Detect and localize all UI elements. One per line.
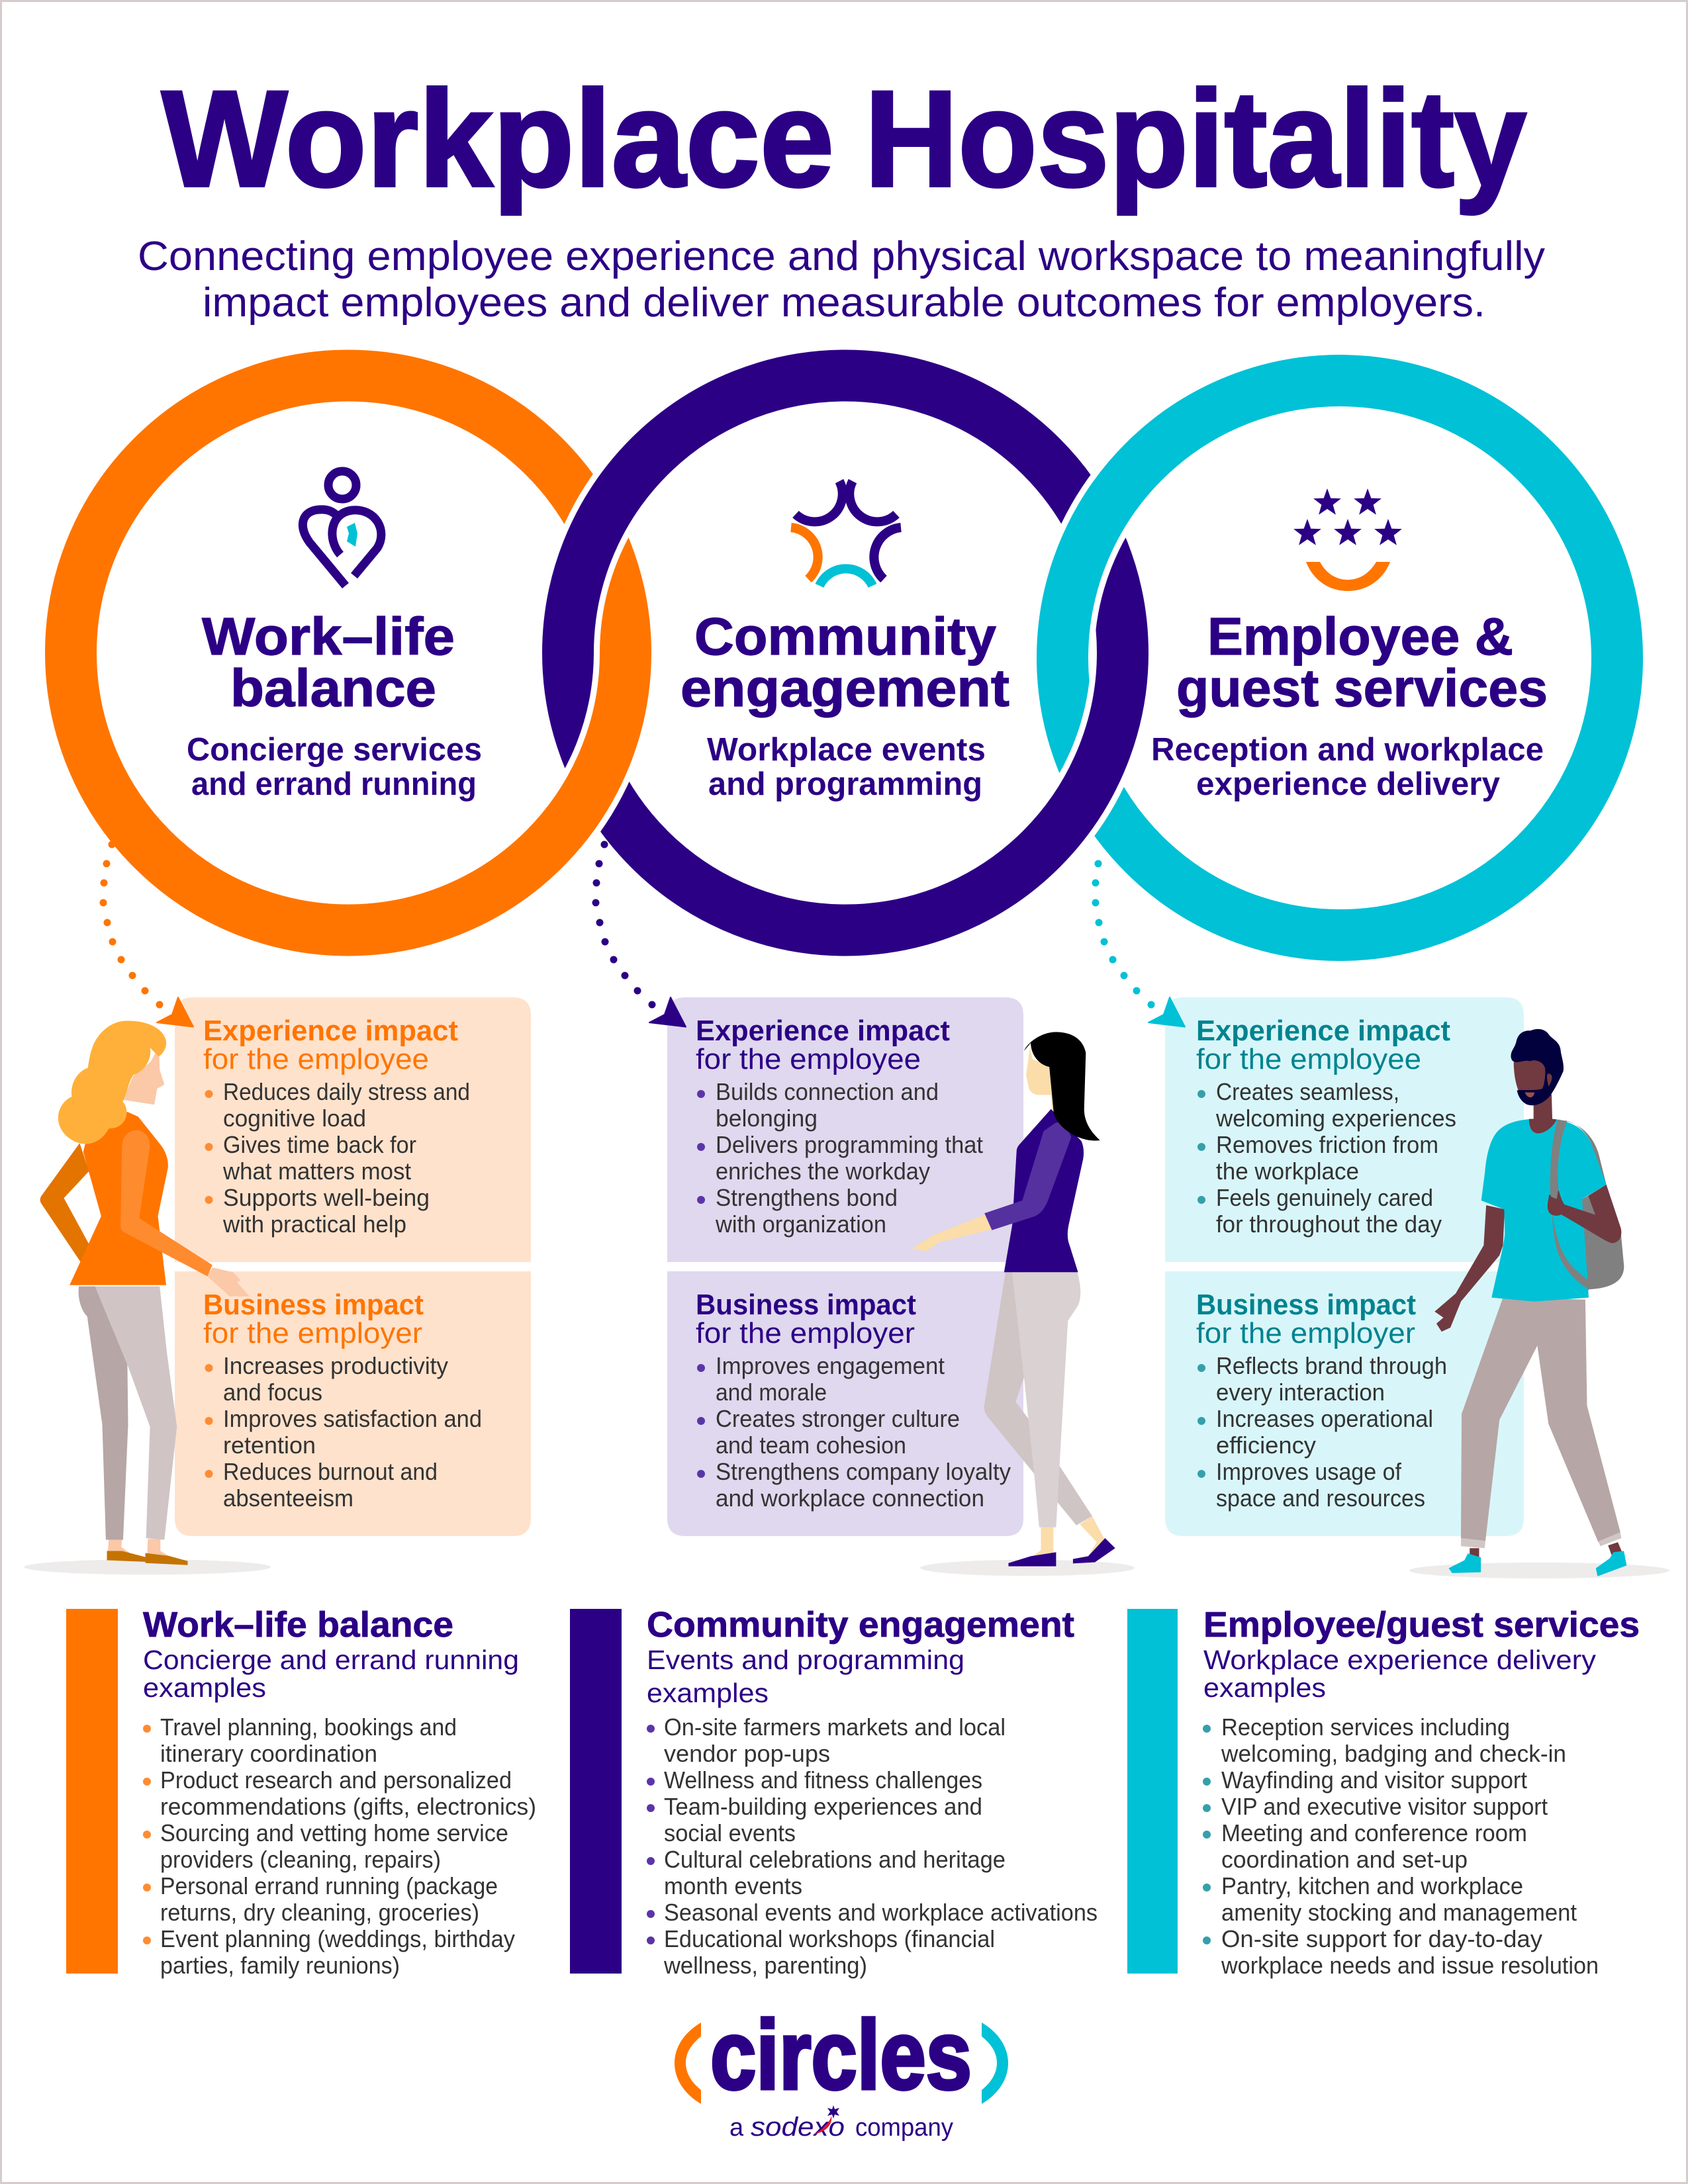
title xyxy=(162,62,1526,215)
list: community examples: social events xyxy=(664,1819,796,1846)
list: work-life examples: returns, dry cleaning, groceries) xyxy=(160,1899,479,1926)
heading: experience impact cyan: for the employee xyxy=(1196,1043,1421,1075)
list: employee guest examples: Meeting and conference room xyxy=(1221,1819,1527,1846)
heading: experience impact purple xyxy=(696,1015,950,1075)
list: business impact orange: absenteeism xyxy=(223,1484,353,1512)
subtitle: Connecting employee experience and physical workspace to meaningfully xyxy=(138,234,1545,279)
text: employee and guest services circle xyxy=(1151,607,1548,802)
list: experience impact orange: Gives time back for xyxy=(223,1131,416,1158)
text: community engagement circle: Community xyxy=(694,607,997,666)
heading: employee guest services xyxy=(1203,1605,1640,1703)
list: work-life examples xyxy=(143,1713,536,1979)
heading: business impact cyan: for the employer xyxy=(1196,1317,1415,1349)
list: business impact purple: and morale xyxy=(716,1379,827,1406)
list: community examples: On-site farmers markets and local xyxy=(664,1713,1006,1741)
list: business impact cyan: every interaction xyxy=(1216,1379,1385,1406)
list: employee guest examples: Reception services including xyxy=(1221,1713,1510,1741)
list: business impact orange xyxy=(205,1352,482,1512)
list: community examples: Cultural celebrations and heritage xyxy=(664,1846,1006,1873)
title: Hospitality xyxy=(865,62,1526,215)
arrow: purple dotted xyxy=(592,841,686,1027)
list: business impact cyan: efficiency xyxy=(1216,1432,1316,1459)
heading: experience impact orange: Experience impact xyxy=(203,1015,458,1047)
list: business impact cyan xyxy=(1197,1352,1447,1512)
panel: work-life balance examples xyxy=(66,1605,536,1979)
list: employee guest examples: workplace needs and issue resolution xyxy=(1221,1952,1599,1979)
list: experience impact orange: Reduces daily stress and xyxy=(223,1078,470,1105)
heading: work-life balance: examples xyxy=(143,1672,266,1703)
logo: circles a sodexo company: sodexo xyxy=(751,2113,845,2142)
heading: experience impact orange xyxy=(203,1015,458,1075)
logo: circles a sodexo company xyxy=(675,2001,1008,2142)
list: experience impact purple: enriches the workday xyxy=(716,1158,930,1185)
text: employee and guest services circle: Employee & xyxy=(1207,607,1513,666)
list: work-life examples: Personal errand running (package xyxy=(160,1872,498,1899)
list: business impact cyan: space and resources xyxy=(1216,1484,1425,1512)
text: work-life balance circle xyxy=(187,607,482,802)
list: experience impact orange: with practical help xyxy=(222,1210,406,1238)
list: experience impact purple: belonging xyxy=(716,1105,818,1132)
list: business impact cyan: Improves usage of xyxy=(1216,1458,1402,1485)
list: work-life examples: Sourcing and vetting home service xyxy=(160,1819,508,1846)
heading: employee guest services: Employee/guest services xyxy=(1203,1605,1640,1645)
bar: cyan xyxy=(1127,1609,1178,1974)
heading: business impact orange: Business impact xyxy=(203,1289,424,1321)
bar: orange xyxy=(66,1609,118,1974)
list: community examples: Educational workshops (financial xyxy=(664,1925,995,1952)
text: employee and guest services circle: Reception and workplace xyxy=(1151,732,1544,768)
list: community examples xyxy=(647,1713,1098,1979)
list: experience impact purple: with organization xyxy=(715,1210,886,1238)
text: community engagement circle: and programming xyxy=(708,766,982,802)
heading: work-life balance: Concierge and errand running xyxy=(143,1645,519,1675)
list: business impact orange: Increases productivity xyxy=(223,1352,448,1379)
icon: community star xyxy=(791,481,901,586)
list: work-life examples: itinerary coordination xyxy=(160,1740,377,1767)
heading: experience impact purple: Experience impact xyxy=(696,1015,950,1047)
list: business impact purple xyxy=(697,1352,1011,1512)
list: experience impact purple: Builds connection and xyxy=(716,1078,939,1105)
list: experience impact purple: Delivers programming that xyxy=(716,1131,983,1158)
list: community examples: vendor pop-ups xyxy=(664,1740,830,1767)
illustration: woman in purple xyxy=(912,1032,1135,1576)
list: community examples: wellness, parenting) xyxy=(663,1952,867,1979)
list: business impact orange: retention xyxy=(223,1432,316,1459)
panel: community engagement examples xyxy=(570,1605,1098,1979)
list: experience impact cyan: the workplace xyxy=(1216,1158,1359,1185)
list: experience impact cyan: Creates seamless, xyxy=(1216,1078,1399,1105)
panel: purple impact xyxy=(667,997,1023,1536)
list: experience impact cyan xyxy=(1197,1078,1456,1238)
heading: employee guest services: examples xyxy=(1203,1672,1326,1703)
panel: orange impact xyxy=(175,997,531,1536)
list: experience impact orange: what matters most xyxy=(222,1158,411,1185)
panel: employee guest services examples xyxy=(1127,1605,1640,1979)
title: Workplace xyxy=(162,62,834,215)
list: work-life examples: Travel planning, bookings and xyxy=(160,1713,457,1741)
heading: employee guest services: Workplace experience delivery xyxy=(1203,1645,1597,1675)
list: community examples: Team-building experiences and xyxy=(664,1793,982,1820)
list: work-life examples: Event planning (weddings, birthday xyxy=(160,1925,515,1952)
heading: business impact orange xyxy=(203,1289,424,1349)
list: business impact purple: Strengthens company loyalty xyxy=(716,1458,1011,1485)
list: business impact orange: Improves satisfaction and xyxy=(223,1405,482,1432)
list: business impact orange: Reduces burnout and xyxy=(223,1458,438,1485)
subtitle xyxy=(138,234,1545,326)
list: business impact orange: and focus xyxy=(223,1379,322,1406)
arrow: cyan dotted xyxy=(1092,860,1185,1027)
heading: community engagement xyxy=(647,1605,1074,1708)
list: experience impact cyan: Removes friction from xyxy=(1216,1131,1438,1158)
heading: experience impact cyan: Experience impact xyxy=(1196,1015,1450,1047)
arrow: orange dotted xyxy=(99,841,193,1027)
text: employee and guest services circle: experience delivery xyxy=(1196,766,1500,802)
text: community engagement circle xyxy=(680,607,1009,802)
heading: experience impact orange: for the employee xyxy=(203,1043,429,1075)
logo: circles a sodexo company: a xyxy=(729,2114,744,2142)
list: employee guest examples: Wayfinding and visitor support xyxy=(1221,1766,1527,1794)
list: community examples: Wellness and fitness challenges xyxy=(664,1766,982,1794)
list: business impact purple: and workplace connection xyxy=(716,1484,984,1512)
text: community engagement circle: Workplace events xyxy=(707,732,986,768)
heading: business impact purple: for the employer xyxy=(696,1317,915,1349)
heading: business impact cyan: Business impact xyxy=(1196,1289,1416,1321)
list: experience impact orange: Supports well-being xyxy=(223,1184,430,1211)
heading: community engagement: examples xyxy=(647,1678,769,1708)
heading: experience impact purple: for the employee xyxy=(696,1043,921,1075)
list: employee guest examples: coordination and set-up xyxy=(1221,1846,1468,1873)
icon: person heart xyxy=(303,471,381,586)
heading: community engagement: Community engagement xyxy=(647,1605,1074,1645)
list: experience impact orange xyxy=(205,1078,470,1238)
list: business impact cyan: Increases operational xyxy=(1216,1405,1433,1432)
heading: business impact cyan xyxy=(1196,1289,1416,1349)
list: experience impact purple xyxy=(697,1078,983,1238)
list: employee guest examples xyxy=(1203,1713,1599,1979)
text: work-life balance circle: Work–life xyxy=(202,607,455,666)
heading: work-life balance: Work–life balance xyxy=(143,1605,453,1645)
list: work-life examples: recommendations (gifts, electronics) xyxy=(160,1793,536,1820)
list: work-life examples: providers (cleaning, repairs) xyxy=(160,1846,441,1873)
list: work-life examples: Product research and personalized xyxy=(160,1766,512,1794)
logo: circles a sodexo company: company xyxy=(855,2114,953,2142)
list: employee guest examples: Pantry, kitchen and workplace xyxy=(1221,1872,1523,1899)
list: employee guest examples: On-site support for day-to-day xyxy=(1221,1925,1542,1952)
text: work-life balance circle: Concierge services xyxy=(187,732,482,768)
text: employee and guest services circle: guest services xyxy=(1176,659,1548,717)
text: community engagement circle: engagement xyxy=(680,659,1009,717)
list: business impact cyan: Reflects brand through xyxy=(1216,1352,1447,1379)
interlocking circles xyxy=(71,376,1617,935)
list: experience impact orange: cognitive load xyxy=(223,1105,366,1132)
list: experience impact cyan: for throughout the day xyxy=(1216,1210,1442,1238)
illustration: man with backpack xyxy=(1409,1029,1669,1578)
list: business impact purple: and team cohesion xyxy=(716,1432,906,1459)
logo: circles a sodexo company: circles xyxy=(710,2001,972,2110)
list: employee guest examples: welcoming, badging and check-in xyxy=(1221,1740,1566,1767)
heading: business impact orange: for the employer xyxy=(203,1317,422,1349)
heading: work-life balance xyxy=(143,1605,519,1703)
list: experience impact cyan: welcoming experiences xyxy=(1215,1105,1456,1132)
list: employee guest examples: amenity stocking and management xyxy=(1221,1899,1577,1926)
list: experience impact purple: Strengthens bond xyxy=(716,1184,898,1211)
list: business impact purple: Creates stronger culture xyxy=(716,1405,960,1432)
heading: experience impact cyan xyxy=(1196,1015,1450,1075)
heading: business impact purple xyxy=(696,1289,916,1349)
illustration: woman in orange xyxy=(24,1021,271,1574)
list: community examples: month events xyxy=(664,1872,802,1899)
text: work-life balance circle: and errand running xyxy=(191,766,477,802)
heading: community engagement: Events and programming xyxy=(647,1645,964,1675)
panel: cyan impact xyxy=(1165,997,1524,1536)
list: business impact purple: Improves engagement xyxy=(716,1352,945,1379)
text: work-life balance circle: balance xyxy=(230,659,436,717)
heading: business impact purple: Business impact xyxy=(696,1289,916,1321)
subtitle: impact employees and deliver measurable outcomes for employers. xyxy=(203,280,1485,326)
bar: purple xyxy=(570,1609,622,1974)
list: employee guest examples: VIP and executive visitor support xyxy=(1221,1793,1548,1820)
list: work-life examples: parties, family reunions) xyxy=(160,1952,400,1979)
list: experience impact cyan: Feels genuinely cared xyxy=(1216,1184,1433,1211)
list: community examples: Seasonal events and workplace activations xyxy=(664,1899,1098,1926)
icon: five stars and smile xyxy=(1293,488,1402,591)
